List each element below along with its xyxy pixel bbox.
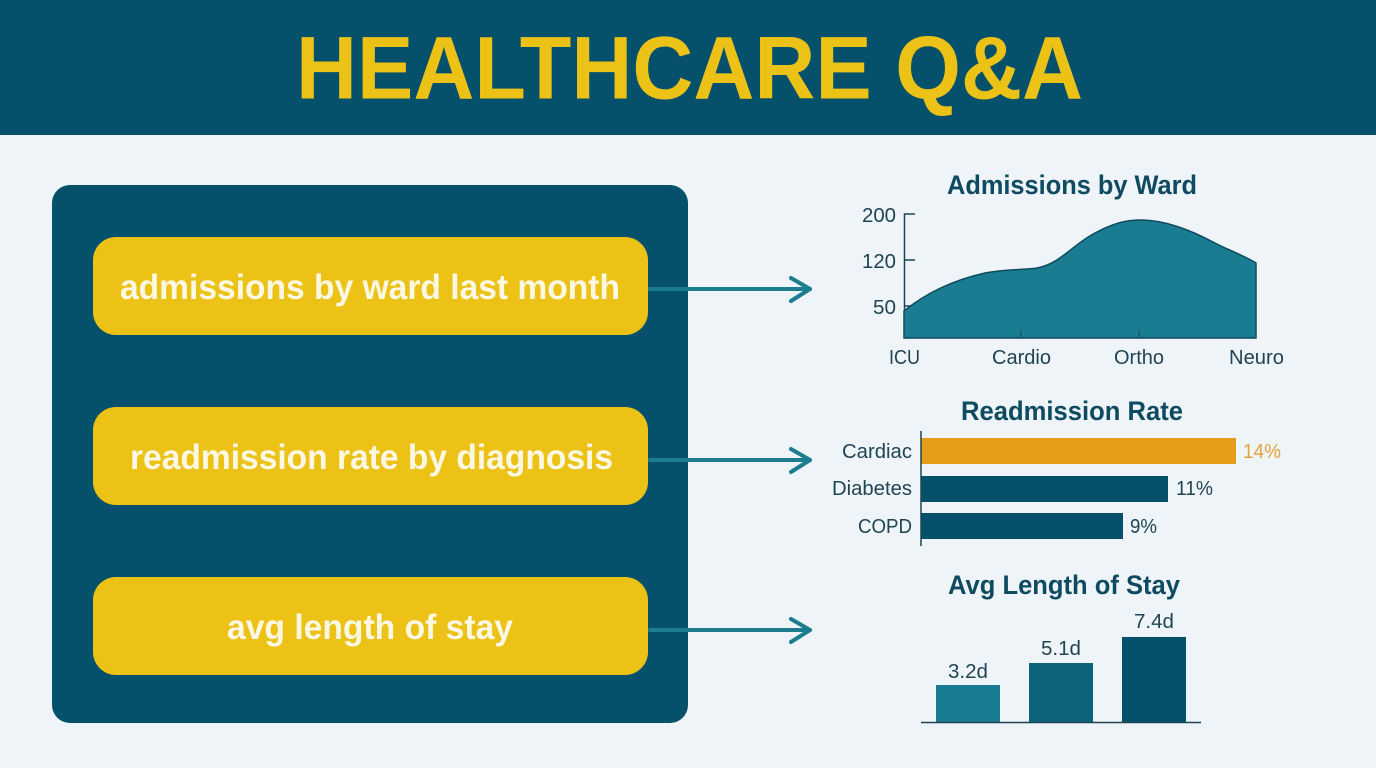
bar: 7.4d bbox=[1122, 611, 1186, 722]
x axis labels bbox=[889, 347, 1284, 369]
y axis: 120 bbox=[862, 251, 896, 273]
x axis labels: ICU bbox=[889, 347, 920, 369]
bar: cardiac: 14% bbox=[1243, 441, 1281, 463]
arrow: readmission question to chart bbox=[650, 449, 810, 472]
chart: admissions by ward bbox=[862, 170, 1284, 369]
question: length of stay bbox=[93, 577, 648, 675]
chart title: Admissions by Ward bbox=[947, 170, 1197, 200]
x axis labels: Neuro bbox=[1229, 347, 1284, 369]
question: admissions by ward: admissions by ward last month bbox=[120, 267, 620, 307]
y axis bbox=[862, 205, 915, 338]
bar: cardiac: Cardiac bbox=[842, 441, 912, 463]
arrow: admissions question to chart bbox=[650, 278, 810, 301]
question: admissions by ward bbox=[93, 237, 648, 335]
bar: 7.4d: 7.4d bbox=[1134, 611, 1174, 633]
question: readmission rate: readmission rate by diagnosis bbox=[130, 437, 613, 477]
bar: cardiac bbox=[842, 438, 1281, 464]
area series bbox=[904, 220, 1256, 338]
bar: COPD: 9% bbox=[1130, 516, 1157, 538]
chart: readmission rate bbox=[832, 396, 1281, 546]
bar: 5.1d bbox=[1029, 638, 1093, 722]
chart title: Readmission Rate bbox=[961, 396, 1183, 426]
y axis: 50 bbox=[873, 297, 896, 319]
bar: diabetes bbox=[832, 476, 1213, 502]
title: HEALTHCARE Q&A bbox=[296, 18, 1083, 118]
x axis ticks bbox=[1021, 330, 1139, 338]
bar: diabetes: Diabetes bbox=[832, 478, 912, 500]
bar: COPD bbox=[858, 513, 1157, 539]
panel: questions bbox=[52, 185, 688, 723]
header banner bbox=[0, 0, 1376, 135]
bar: COPD: COPD bbox=[858, 516, 912, 538]
bar: 3.2d bbox=[936, 661, 1000, 722]
x axis labels: Ortho bbox=[1114, 347, 1164, 369]
y axis: 200 bbox=[862, 205, 896, 227]
x axis labels: Cardio bbox=[992, 347, 1051, 369]
chart: average length of stay bbox=[921, 570, 1201, 722]
bar: 3.2d: 3.2d bbox=[948, 661, 988, 683]
question: readmission rate bbox=[93, 407, 648, 505]
arrow: length of stay question to chart bbox=[650, 619, 810, 642]
chart title: Avg Length of Stay bbox=[948, 570, 1180, 600]
bar: 5.1d: 5.1d bbox=[1041, 638, 1081, 660]
bar: diabetes: 11% bbox=[1176, 478, 1213, 500]
question: length of stay: avg length of stay bbox=[227, 607, 513, 647]
